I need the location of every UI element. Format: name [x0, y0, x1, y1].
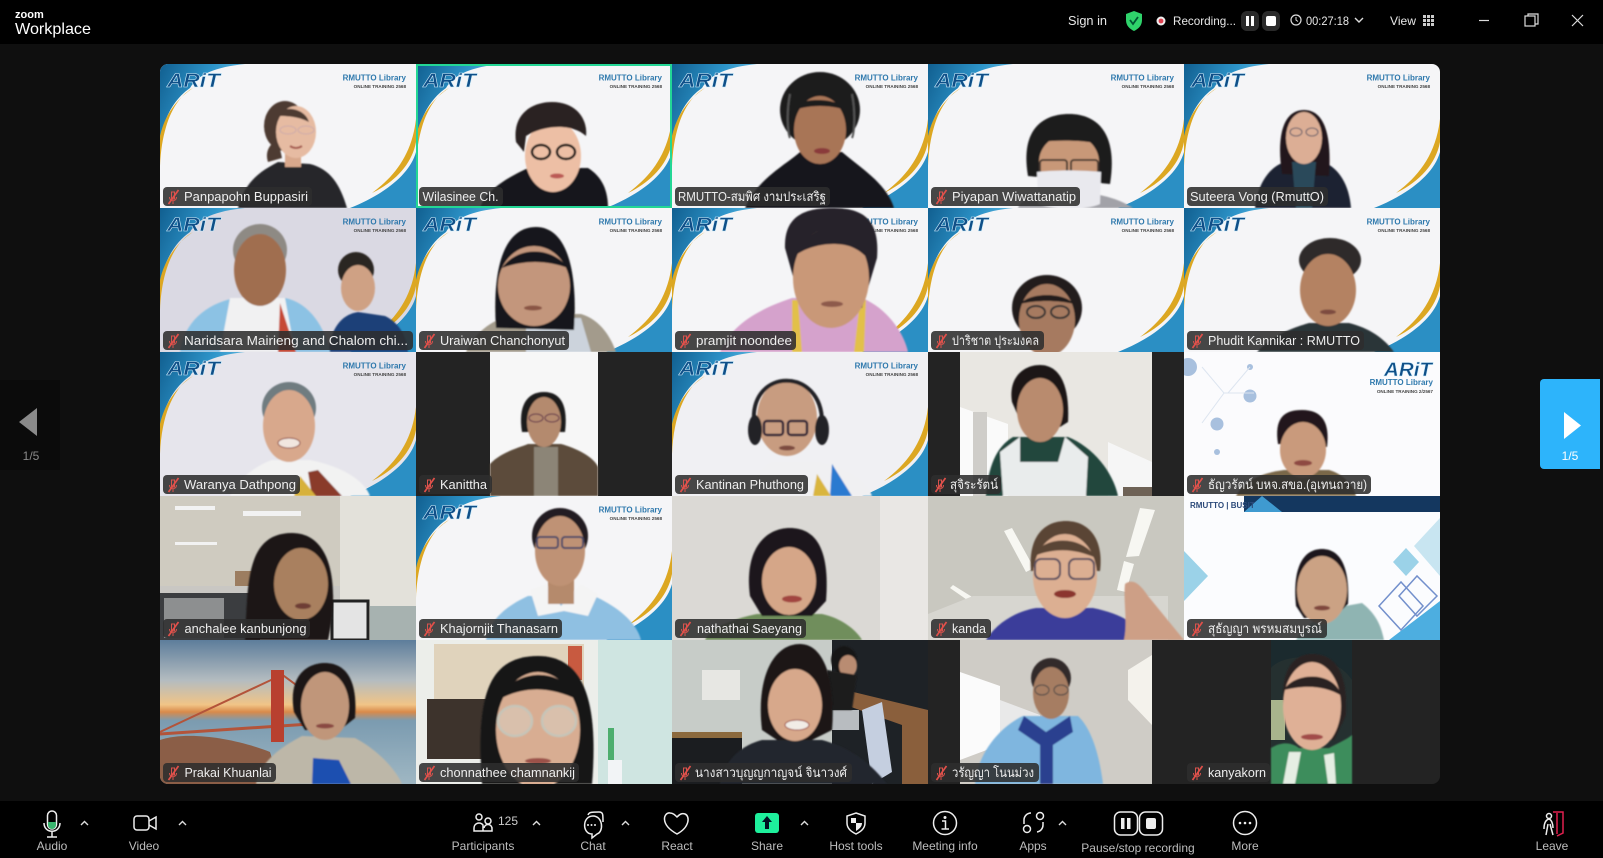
name label: Prakai Khuanlai [184, 765, 272, 780]
tile: kanyakorn [1184, 640, 1440, 784]
name label: kanyakorn [1208, 765, 1266, 780]
template logo: ARiT [166, 215, 222, 236]
toolbar button: React [661, 813, 693, 853]
template logo: ONLINE TRAINING 2568 [610, 84, 662, 89]
name label: Kantinan Phuthong [696, 477, 804, 492]
template logo [422, 216, 662, 232]
video frame [960, 640, 1152, 784]
template logo [678, 72, 918, 88]
toolbar button: Share [751, 813, 808, 853]
previous page arrow: 1/5 [23, 449, 40, 463]
toolbar button: Audio [37, 811, 88, 853]
template logo: ARiT [166, 71, 222, 92]
toolbar button: Host tools [829, 813, 883, 853]
name label: สุธัญญา พรหมสมบูรณ์ [1208, 621, 1322, 637]
toolbar button: More: More [1231, 839, 1259, 853]
tile: kanda [928, 496, 1184, 640]
office background [160, 496, 416, 640]
name label: ธัญวรัตน์ บหจ.สขอ.(อุเทนถวาย) [1208, 477, 1367, 493]
icon: gallery view grid [1423, 15, 1434, 26]
template logo: RMUTTO Library [855, 218, 919, 226]
tile: chonnathee chamnankij [416, 640, 672, 788]
template logo [166, 359, 407, 380]
person [720, 208, 908, 352]
toolbar button: Audio: Audio [37, 839, 68, 853]
toolbar button: Video: Video [129, 839, 160, 853]
lower room [928, 596, 1168, 640]
name label [419, 619, 562, 638]
name label [1187, 619, 1327, 638]
toolbar button: Chat [580, 812, 629, 853]
name label [675, 331, 796, 350]
template logo: ONLINE TRAINING 2/2567 [1377, 389, 1433, 394]
toolbar button: Share: Share [751, 839, 783, 853]
template logo: ONLINE TRAINING 2568 [610, 516, 662, 521]
name label: Uraiwan Chanchonyut [440, 333, 565, 348]
toolbar button: Meeting info [912, 812, 978, 853]
person [705, 528, 862, 640]
tile: Naridsara and Chalom [160, 208, 416, 352]
tile: pramjit noondee [672, 208, 928, 352]
template logo: ARiT [934, 71, 990, 92]
toolbar button: Video [129, 816, 186, 853]
template logo: ONLINE TRAINING 2568 [866, 372, 918, 377]
template logo: ONLINE TRAINING 2568 [1122, 228, 1174, 233]
video frame [960, 352, 1152, 496]
icon: green security shield [1126, 11, 1142, 31]
name label [931, 187, 1080, 206]
tile: Piyapan Wiwattanatip [928, 64, 1184, 208]
pause and stop recording buttons [1241, 11, 1280, 31]
template logo: ONLINE TRAINING 2568 [610, 228, 662, 233]
person [486, 508, 641, 640]
name label: วรัญญา โนนม่วง [952, 765, 1034, 780]
toolbar button: Chat: Chat [580, 839, 606, 853]
name label [931, 763, 1039, 782]
app logo: zoom Workplace [15, 9, 91, 38]
person with headphones [742, 380, 872, 496]
name label [931, 475, 1001, 494]
template logo [678, 359, 919, 380]
tile: Suthanya [1184, 496, 1440, 640]
shelves and wall [427, 640, 672, 784]
person [720, 644, 887, 784]
name label: Khajornjit Thanasarn [440, 621, 558, 636]
person [986, 521, 1184, 640]
template logo [1370, 360, 1434, 394]
name label [675, 475, 808, 494]
tile: Uraiwan Chanchonyut [416, 208, 672, 352]
name label [163, 763, 276, 782]
template logo [166, 72, 406, 88]
template logo: ARiT [422, 503, 478, 524]
person [1012, 275, 1082, 356]
toolbar button: Pause/stop recording [1081, 812, 1195, 855]
name label: Wilasinee Ch. [422, 189, 498, 204]
top right meeting controls [1068, 11, 1434, 31]
name label [163, 331, 413, 350]
template logo: ARiT [678, 359, 734, 380]
template logo: RMUTTO Library [599, 218, 663, 226]
template logo: RMUTTO Library [855, 74, 919, 82]
Golden Gate bridge scene [160, 670, 330, 784]
tile: Boonyakan [672, 640, 928, 784]
person [1295, 549, 1384, 640]
template logo: RMUTTO Library [855, 362, 919, 370]
template logo: ONLINE TRAINING 2568 [1378, 84, 1430, 89]
name label: Phudit Kannikar : RMUTTO [1208, 333, 1360, 348]
template logo: ONLINE TRAINING 2568 [354, 84, 406, 89]
name label [163, 475, 300, 494]
name label: chonnathee chamnankij [440, 765, 575, 780]
person [1236, 410, 1356, 496]
template logo: RMUTTO Library [343, 218, 407, 226]
template logo: RMUTTO Library [343, 362, 407, 370]
template logo [422, 503, 663, 524]
top title bar [0, 0, 1603, 44]
template logo: RMUTTO Library [1111, 218, 1175, 226]
name label: Piyapan Wiwattanatip [952, 189, 1076, 204]
name label [163, 619, 310, 638]
template logo: RMUTTO Library [1111, 74, 1175, 82]
person [1255, 110, 1351, 208]
name label [1187, 475, 1371, 494]
template logo: RMUTTO Library [599, 506, 663, 514]
template logo: ARiT [678, 71, 734, 92]
toolbar button: Meeting info: Meeting info [912, 839, 978, 853]
icon: recording dot [1156, 16, 1166, 26]
toolbar button: Pause/stop recording: Pause/stop recording [1081, 841, 1195, 855]
name label: kanda [952, 621, 987, 636]
name label: Waranya Dathpong [184, 477, 296, 492]
person [1257, 238, 1394, 352]
tile: Phudit Kannikar [1184, 208, 1440, 352]
tile: Kantinan Phuthong [672, 352, 928, 496]
template logo: ONLINE TRAINING 2568 [354, 372, 406, 377]
template logo [166, 216, 406, 232]
name label [163, 187, 312, 206]
tile: Sujirarat [928, 352, 1184, 496]
toolbar button: Host tools: Host tools [829, 839, 883, 853]
tile: Parichat [928, 208, 1184, 356]
hexagon dot template [1179, 358, 1256, 455]
template logo: RMUTTO Library [599, 74, 663, 82]
tile: Khajornjit Thanasarn [416, 496, 672, 640]
tile: Waranya Nonmuang [928, 640, 1184, 784]
participant video grid [160, 64, 1440, 788]
person [230, 382, 370, 496]
person [256, 663, 402, 784]
window controls [1479, 14, 1583, 26]
template logo: ARiT [1190, 71, 1246, 92]
second person behind [827, 646, 857, 710]
toolbar button: Participants [452, 814, 540, 853]
template logo: ARiT [422, 71, 478, 92]
previous page arrow [0, 380, 60, 470]
toolbar button: Apps: Apps [1019, 839, 1047, 853]
tile: Kanittha [416, 352, 672, 496]
toolbar button: Leave [1536, 812, 1569, 853]
template logo: ARiT [422, 215, 478, 236]
app logo: zoom Workplace: zoom [15, 9, 44, 21]
template logo: RMUTTO Library [1367, 74, 1431, 82]
name label: anchalee kanbunjong [184, 621, 306, 636]
template logo: RMUTTO Library [1367, 218, 1431, 226]
tile: Panpapohn Buppasiri [160, 64, 416, 208]
next page arrow: 1/5 [1562, 449, 1579, 463]
tile: Suteera Vong [1184, 64, 1440, 208]
toolbar button: Participants: Participants [452, 839, 514, 853]
template logo [422, 72, 662, 88]
name label: สุจิระรัตน์ [950, 477, 998, 493]
two people [180, 224, 408, 352]
person with headset [745, 72, 894, 208]
person [245, 533, 333, 640]
tile: Waranya Dathpong [160, 352, 416, 496]
name label: Suteera Vong (RmuttO) [1190, 189, 1324, 204]
toolbar button: React: React [661, 839, 693, 853]
name label: nathathai Saeyang [697, 621, 802, 636]
name label [675, 619, 806, 638]
tile: Prakai Khuanlai [160, 640, 416, 784]
tile: Thanyarat [1179, 352, 1440, 496]
name label: Kanittha [440, 477, 488, 492]
wall panel [880, 496, 928, 640]
template logo: RMUTTO Library [343, 74, 407, 82]
template header and diamonds: RMUTTO | BUSIT [1190, 501, 1255, 510]
name label [675, 763, 852, 782]
template logo: ARiT [166, 359, 222, 380]
name label [419, 331, 569, 350]
name label: Naridsara Mairieng and Chalom chi... [184, 333, 408, 348]
template logo: ONLINE TRAINING 2568 [1378, 228, 1430, 233]
name label: RMUTTO-สมพิศ งามประเสริฐ [678, 189, 826, 205]
template logo: ARiT [678, 215, 734, 236]
template logo: ONLINE TRAINING 2568 [1122, 84, 1174, 89]
toolbar button: Participants: 125 [498, 814, 518, 828]
ceiling lights [950, 508, 1155, 620]
person [466, 227, 616, 352]
template logo [678, 216, 918, 232]
icon: timer clock [1291, 15, 1301, 25]
bottom toolbar [0, 801, 1603, 858]
office background [672, 640, 928, 784]
template logo: RMUTTO Library [1370, 378, 1434, 387]
person [480, 102, 608, 208]
template logo: ONLINE TRAINING 2568 [866, 228, 918, 233]
name label: ปาริชาต ปุระมงคล [952, 333, 1039, 349]
active speaker border [417, 65, 671, 207]
name label [931, 619, 991, 638]
tile: Wilasinee Ch. active speaker [416, 64, 672, 208]
template header and diamonds [1184, 496, 1440, 640]
name label: Panpapohn Buppasiri [184, 189, 308, 204]
template logo [934, 216, 1174, 232]
template logo: ARiT [1383, 360, 1434, 381]
name label [419, 763, 579, 782]
person [480, 656, 594, 788]
toolbar button: Leave: Leave [1536, 839, 1569, 853]
name label [931, 331, 1044, 350]
tile: anchalee kanbunjong [160, 496, 416, 640]
tile: nathathai Saeyang [672, 496, 928, 640]
template logo: ONLINE TRAINING 2568 [354, 228, 406, 233]
name label: นางสาวบุญญกาญจน์ จินาวงศ์ [695, 765, 848, 781]
app logo: zoom Workplace: Workplace [15, 21, 91, 38]
person [238, 101, 347, 208]
name label [1187, 331, 1364, 350]
template logo [934, 72, 1174, 88]
template logo [1190, 72, 1430, 88]
top right meeting controls: Sign in [1068, 13, 1107, 28]
toolbar button: Apps [1019, 812, 1066, 853]
top right meeting controls: 00:27:18 [1306, 14, 1349, 28]
video frame [490, 352, 598, 496]
name label: pramjit noondee [696, 333, 792, 348]
top right meeting controls: View [1390, 14, 1416, 28]
tile: RMUTTO Somphit [672, 64, 928, 208]
template logo: ONLINE TRAINING 2568 [866, 84, 918, 89]
name label [1187, 763, 1270, 782]
next page arrow [1540, 379, 1600, 469]
template logo [1190, 216, 1430, 232]
video frame [1271, 640, 1352, 784]
name label [419, 475, 492, 494]
person with mask [1018, 114, 1133, 208]
template logo: ARiT [1190, 215, 1246, 236]
top right meeting controls: Recording... [1173, 14, 1236, 28]
template logo: ARiT [934, 215, 990, 236]
toolbar button: More [1231, 812, 1259, 853]
